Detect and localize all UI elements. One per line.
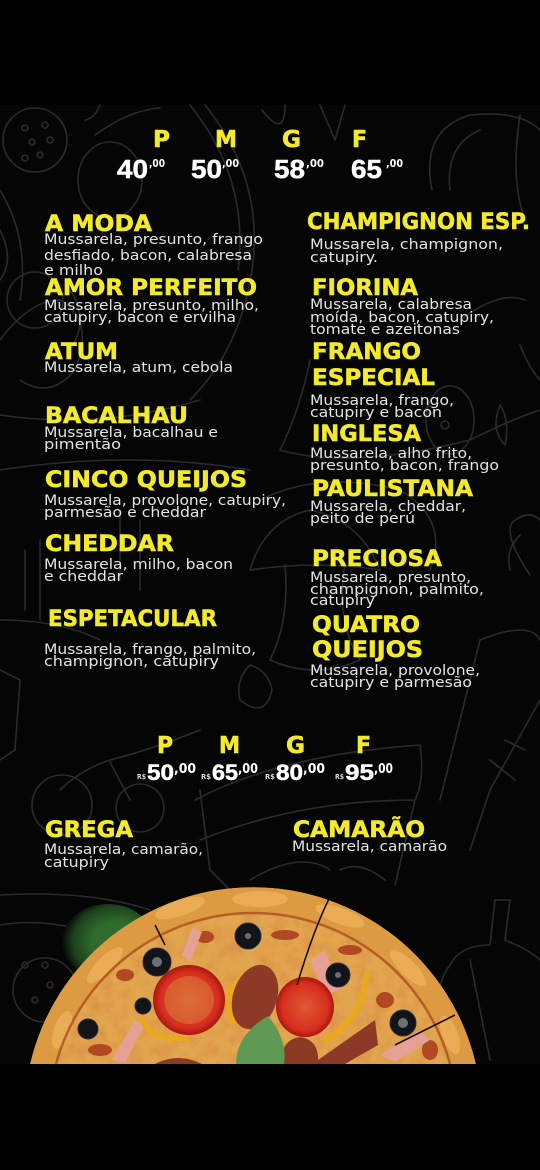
price table: standard pizzas: ,00 xyxy=(149,157,165,170)
black olives xyxy=(78,923,416,1039)
price table: standard pizzas: 40 xyxy=(117,154,148,184)
price table: standard pizzas: 50 xyxy=(191,154,222,184)
menu item: Cinco Queijos xyxy=(44,467,286,521)
menu item: Bacalhau: BACALHAU xyxy=(45,403,188,429)
price table: special pizzas: ,00 xyxy=(174,762,196,777)
menu item: A Moda: desfiado, bacon, calabresa xyxy=(44,248,252,264)
menu item: Amor Perfeito: Mussarela, presunto, milho, xyxy=(44,298,259,314)
price table: special pizzas: P xyxy=(157,733,173,759)
menu item: Frango Especial: ESPECIAL xyxy=(312,365,435,391)
menu item: Grega: GREGA xyxy=(45,817,134,843)
menu item: Cinco Queijos: CINCO QUEIJOS xyxy=(45,467,247,493)
price table: special pizzas: ,00 xyxy=(238,762,258,777)
menu item: A Moda xyxy=(44,211,263,279)
menu item: Frango Especial: catupiry e bacon xyxy=(310,405,442,421)
menu item: Cheddar: e cheddar xyxy=(44,569,123,585)
menu item: Amor Perfeito: AMOR PERFEITO xyxy=(45,275,257,301)
tomato slice right xyxy=(276,977,334,1037)
menu item: Camarão xyxy=(292,815,447,855)
menu item: Preciosa: PRECIOSA xyxy=(312,546,443,572)
menu item: A Moda: e milho xyxy=(44,263,103,279)
menu item: Frango Especial: Mussarela, frango, xyxy=(310,393,454,409)
menu item: Preciosa xyxy=(310,546,484,609)
menu item: Cinco Queijos: Mussarela, provolone, catupiry, xyxy=(44,493,286,509)
menu item: Espetacular: ESPETACULAR xyxy=(48,606,217,632)
price table: special pizzas: R$ xyxy=(137,773,146,781)
salami slices xyxy=(155,959,378,1064)
icon: basil leaf behind pizza xyxy=(62,904,154,980)
price table: special pizzas: ,00 xyxy=(374,762,393,777)
menu item: Quatro Queijos: QUATRO xyxy=(312,612,420,638)
sauce rim xyxy=(56,913,450,1064)
menu item: Bacalhau xyxy=(44,403,218,453)
price table: special pizzas: 65 xyxy=(212,760,238,785)
pizza cheese xyxy=(56,913,450,1064)
price table: special pizzas: R$ xyxy=(201,773,211,781)
price table: special pizzas: G xyxy=(286,733,305,759)
menu item: Fiorina: Mussarela, calabresa xyxy=(310,297,472,313)
menu item: Cinco Queijos: parmesão e cheddar xyxy=(44,505,206,521)
menu item: Camarão: Mussarela, camarão xyxy=(292,839,447,855)
menu item: Preciosa: champignon, palmito, xyxy=(310,582,484,598)
menu item: Champignon Esp.: catupiry. xyxy=(310,250,378,266)
menu item: Grega: catupiry xyxy=(44,855,109,871)
basil leaf topping xyxy=(236,1016,285,1064)
menu item: Paulistana xyxy=(310,476,474,527)
price table: standard pizzas: M xyxy=(215,127,237,153)
menu item: Bacalhau: Mussarela, bacalhau e xyxy=(44,425,218,441)
menu item: Preciosa: Mussarela, presunto, xyxy=(310,570,471,586)
price table: standard pizzas: 65 xyxy=(351,154,382,184)
price table: special pizzas: 80 xyxy=(276,760,303,785)
price table: special pizzas: 95 xyxy=(345,760,374,785)
olive holes xyxy=(152,933,408,1028)
tomato slice left xyxy=(153,965,225,1035)
price table: special pizzas: F xyxy=(356,733,371,759)
menu item: Preciosa: catupiry xyxy=(310,593,375,609)
menu item: Grega xyxy=(44,817,203,871)
menu item: Cheddar: CHEDDAR xyxy=(45,531,174,557)
menu item: Atum: ATUM xyxy=(45,339,118,365)
price table: special pizzas: ,00 xyxy=(303,762,325,777)
menu item: A Moda: Mussarela, presunto, frango xyxy=(44,232,263,248)
slice cuts xyxy=(155,893,455,1045)
menu item: Fiorina: tomate e azeitonas xyxy=(310,322,460,338)
menu item: Quatro Queijos: Mussarela, provolone, xyxy=(310,663,480,679)
price table: special pizzas: R$ xyxy=(335,773,344,781)
menu item: Grega: Mussarela, camarão, xyxy=(44,842,203,858)
menu item: Cheddar: Mussarela, milho, bacon xyxy=(44,557,233,573)
menu item: Fiorina: moída, bacon, catupiry, xyxy=(310,310,494,326)
menu item: Frango Especial xyxy=(310,339,454,421)
price table: special pizzas: 50 xyxy=(147,760,174,785)
menu item: Bacalhau: pimentão xyxy=(44,437,121,453)
menu item: Frango Especial: FRANGO xyxy=(312,339,421,365)
price table: special pizzas: M xyxy=(219,733,240,759)
price table: standard pizzas: P xyxy=(153,127,170,153)
menu item: Inglesa: INGLESA xyxy=(312,421,422,447)
sauce spots xyxy=(88,930,438,1060)
price table: standard pizzas: F xyxy=(352,127,367,153)
price table: standard pizzas: ,00 xyxy=(386,157,403,170)
crust highlights xyxy=(48,891,464,1057)
menu item: Camarão: CAMARÃO xyxy=(293,815,425,843)
menu item: Inglesa: Mussarela, alho frito, xyxy=(310,446,472,462)
ham strips xyxy=(112,928,430,1062)
menu item: Atum xyxy=(44,339,233,376)
menu item: A Moda: A MODA xyxy=(45,211,153,237)
menu item: Espetacular xyxy=(44,606,256,670)
menu item: Paulistana: PAULISTANA xyxy=(312,476,474,502)
menu item: Fiorina: FIORINA xyxy=(312,275,419,301)
menu item: Amor Perfeito: catupiry, bacon e ervilha xyxy=(44,310,236,326)
menu item: Amor Perfeito xyxy=(44,275,259,326)
price table: standard pizzas: ,00 xyxy=(222,157,239,170)
price table: special pizzas xyxy=(137,733,393,785)
menu item: Espetacular: Mussarela, frango, palmito, xyxy=(44,642,256,658)
menu item: Champignon Esp.: CHAMPIGNON ESP. xyxy=(307,209,530,235)
pizza photo illustration xyxy=(30,887,476,1064)
menu item: Paulistana: Mussarela, cheddar, xyxy=(310,499,466,515)
menu item: Paulistana: peito de perú xyxy=(310,511,415,527)
menu item: Quatro Queijos: QUEIJOS xyxy=(312,637,423,663)
price table: standard pizzas: G xyxy=(282,127,301,153)
menu item: Inglesa: presunto, bacon, frango xyxy=(310,458,499,474)
menu item: Quatro Queijos xyxy=(310,612,480,691)
pizza crust xyxy=(30,887,476,1064)
menu item: Espetacular: champignon, catupiry xyxy=(44,654,219,670)
tomato slice left flesh xyxy=(164,976,214,1024)
menu item: Champignon Esp.: Mussarela, champignon, xyxy=(310,237,503,253)
menu item: Cheddar xyxy=(44,531,233,585)
menu item: Inglesa xyxy=(310,421,499,474)
menu item: Champignon Esp. xyxy=(307,209,530,266)
price table: standard pizzas xyxy=(117,127,403,184)
price table: standard pizzas: 58 xyxy=(274,154,305,184)
price table: standard pizzas: ,00 xyxy=(306,157,324,170)
menu item: Quatro Queijos: catupiry e parmesão xyxy=(310,675,472,691)
price table: special pizzas: R$ xyxy=(265,773,275,781)
yellow pepper strips xyxy=(142,975,366,1040)
menu item: Atum: Mussarela, atum, cebola xyxy=(44,360,233,376)
menu item: Fiorina xyxy=(310,275,494,338)
